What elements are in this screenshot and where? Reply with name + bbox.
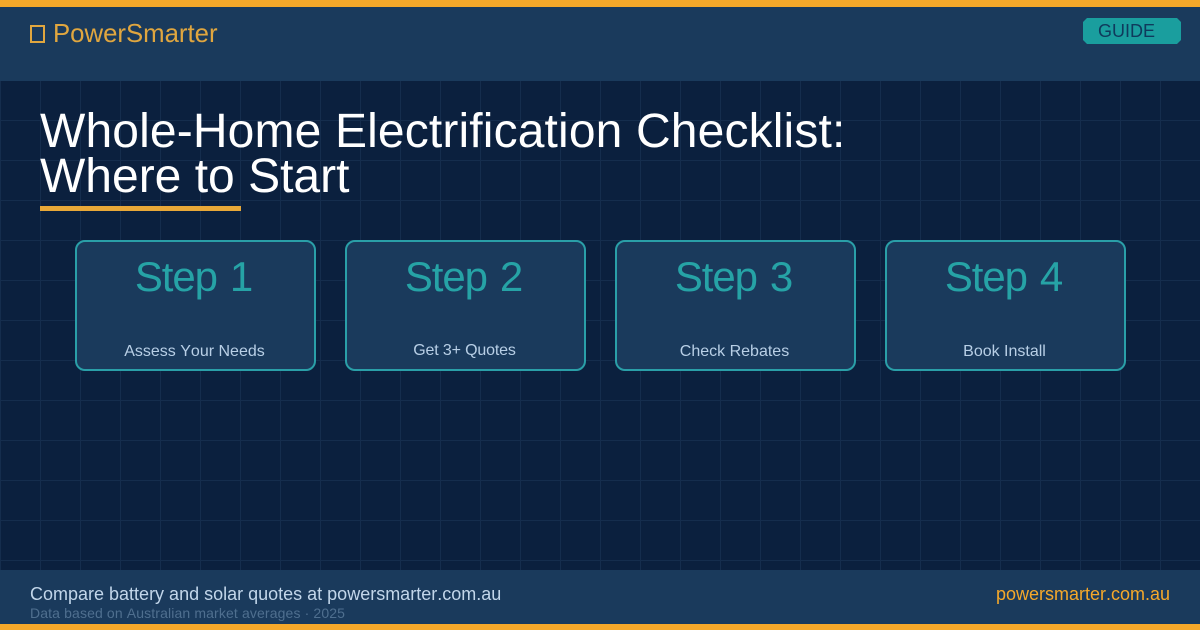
title: Where to Start [40, 150, 349, 203]
footer url: powersmarter.com.au [996, 584, 1170, 604]
header band [0, 0, 1200, 81]
footer call to action: Compare battery and solar quotes at powersmarter.com.au [30, 584, 501, 604]
step 1 label: Assess Your Needs [124, 343, 265, 360]
footer band [0, 570, 1200, 630]
top accent bar [0, 0, 1200, 7]
step 3 label: Check Rebates [680, 343, 789, 360]
step 1 heading: Step 1 [135, 253, 252, 300]
step 2 heading: Step 2 [405, 253, 522, 300]
title [40, 105, 845, 203]
title underline [40, 206, 241, 211]
title: Whole-Home Electrification Checklist: [40, 105, 845, 158]
step 2 label: Get 3+ Quotes [413, 342, 516, 359]
bottom accent bar [0, 624, 1200, 630]
step card 1 [75, 240, 316, 371]
step card 3 [615, 240, 856, 371]
footer data note: Data based on Australian market averages · 2025 [30, 605, 345, 621]
step card 4 [885, 240, 1126, 371]
guide badge: GUIDE [1098, 21, 1155, 41]
step card 2 [345, 240, 586, 371]
step 3 heading: Step 3 [675, 253, 792, 300]
step 4 heading: Step 4 [945, 253, 1062, 300]
guide badge [1083, 18, 1181, 44]
logo: PowerSmarter [53, 20, 218, 48]
step 4 label: Book Install [963, 343, 1046, 360]
